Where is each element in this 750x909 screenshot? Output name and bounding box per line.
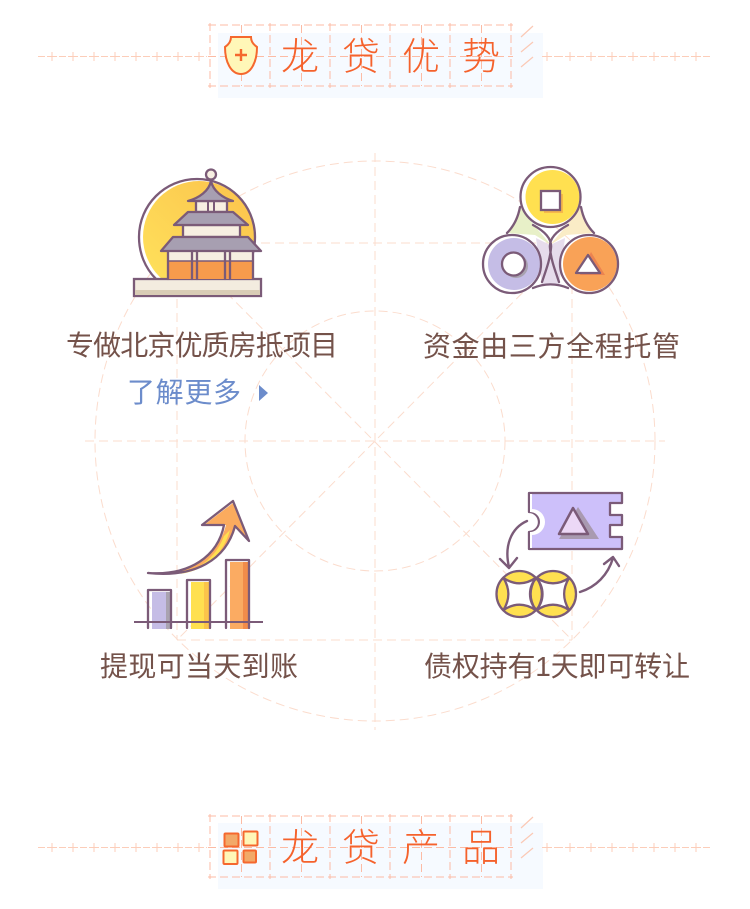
coins	[496, 571, 542, 617]
triangle	[559, 507, 599, 539]
bar outlines	[148, 560, 249, 628]
heading: 龙	[281, 37, 319, 79]
left coin	[483, 235, 541, 293]
heading: 贷	[342, 828, 380, 870]
link shape fills	[507, 207, 551, 245]
icon: temple and sun	[134, 170, 261, 296]
base	[134, 279, 261, 296]
arrow right	[580, 557, 619, 592]
top coin	[520, 167, 580, 227]
icon: three linked coins	[483, 167, 618, 293]
header background	[218, 33, 543, 98]
right coin	[560, 235, 618, 293]
heading: 贷	[342, 37, 380, 79]
heading: 势	[462, 37, 500, 79]
bar fills	[152, 592, 172, 629]
roofs	[161, 237, 261, 251]
heading: 优	[402, 37, 440, 79]
header: 龙贷产品	[38, 814, 711, 889]
heading	[281, 828, 500, 870]
text: 债权持有1天即可转让: 债权持有1天即可转让	[424, 651, 690, 682]
ticket	[529, 493, 622, 549]
lower hall	[168, 251, 253, 279]
icon: rising bars and arrow	[134, 501, 263, 629]
text: 专做北京优质房抵项目: 专做北京优质房抵项目	[66, 330, 338, 361]
icon: shield	[225, 37, 257, 74]
link: 了解更多: 了解更多	[127, 377, 241, 408]
middle hall	[183, 225, 240, 237]
upper hall	[196, 201, 227, 212]
finial	[206, 170, 216, 180]
background guide circles	[85, 153, 665, 730]
heading: 龙	[281, 828, 319, 870]
icon: four squares	[224, 832, 258, 864]
heading	[281, 37, 500, 79]
text: 资金由三方全程托管: 资金由三方全程托管	[423, 331, 680, 362]
heading: 品	[462, 828, 500, 870]
text: 提现可当天到账: 提现可当天到账	[100, 651, 298, 682]
heading: 产	[402, 828, 440, 870]
baseline	[134, 621, 263, 623]
arrow left	[500, 521, 527, 568]
arrow	[148, 503, 248, 574]
header background	[218, 823, 543, 889]
icon: ticket and coins exchange	[496, 493, 622, 617]
icon: link arrow	[259, 385, 268, 401]
link lines	[507, 207, 594, 288]
header: 龙贷优势	[38, 23, 711, 98]
